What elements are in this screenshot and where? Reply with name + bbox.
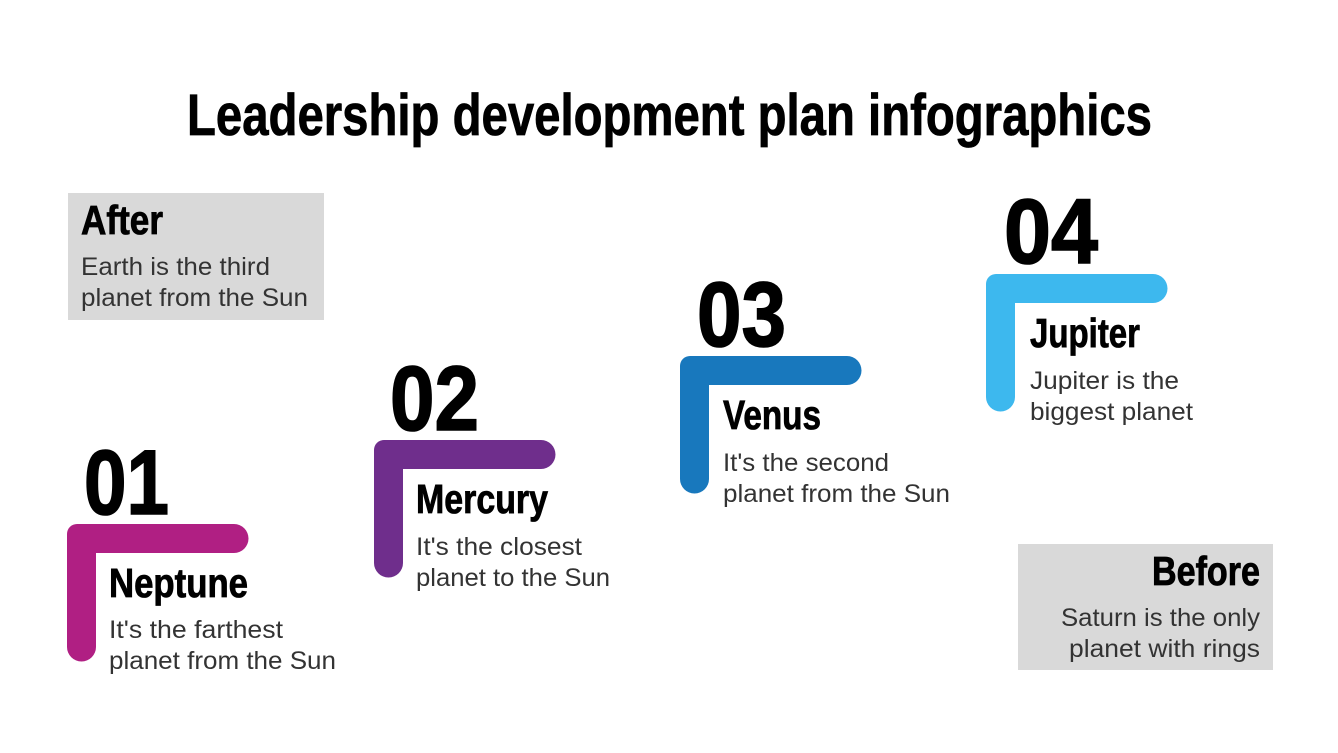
heading: before: Before: [1152, 548, 1260, 594]
text: after description: Earth is the third: [81, 253, 270, 281]
number 01: 01: [84, 432, 169, 534]
text: before description: [1061, 604, 1261, 663]
panel: before: [1018, 544, 1273, 670]
text: Neptune description: It's the farthest: [109, 616, 283, 644]
heading: Jupiter: Jupiter: [1030, 310, 1140, 356]
text: Neptune description: planet from the Sun: [109, 647, 336, 675]
text: Mercury description: planet to the Sun: [416, 564, 610, 592]
bracket: blue: [680, 356, 862, 493]
text: Jupiter description: Jupiter is the: [1030, 367, 1179, 395]
bracket: purple: [374, 440, 555, 578]
number 03: 03: [697, 264, 786, 366]
heading: after: After: [81, 197, 163, 243]
heading: Mercury: Mercury: [416, 476, 548, 522]
step 04: Jupiter: [986, 181, 1193, 426]
step 03: Venus: [680, 264, 950, 508]
bracket: magenta: [67, 524, 249, 661]
text: Jupiter description: biggest planet: [1030, 398, 1193, 426]
text: Mercury description: [416, 533, 610, 592]
text: Venus description: [723, 449, 950, 508]
text: after description: planet from the Sun: [81, 284, 308, 312]
panel: after: [68, 193, 324, 320]
heading: Venus: Venus: [723, 392, 821, 438]
text: after description: [81, 253, 308, 312]
step 01: Neptune: [67, 432, 336, 675]
title: Leadership development plan infographics: [187, 83, 1152, 148]
text: Venus description: It's the second: [723, 449, 889, 477]
heading: Neptune: Neptune: [109, 560, 248, 606]
bracket: sky blue: [986, 274, 1168, 412]
number 04: 04: [1004, 181, 1098, 283]
text: Mercury description: It's the closest: [416, 533, 582, 561]
text: Venus description: planet from the Sun: [723, 480, 950, 508]
step 02: Mercury: [374, 348, 610, 592]
text: Jupiter description: [1030, 367, 1193, 426]
text: before description: Saturn is the only: [1061, 604, 1261, 632]
number 02: 02: [390, 348, 479, 450]
text: Neptune description: [109, 616, 336, 675]
text: before description: planet with rings: [1069, 635, 1260, 663]
